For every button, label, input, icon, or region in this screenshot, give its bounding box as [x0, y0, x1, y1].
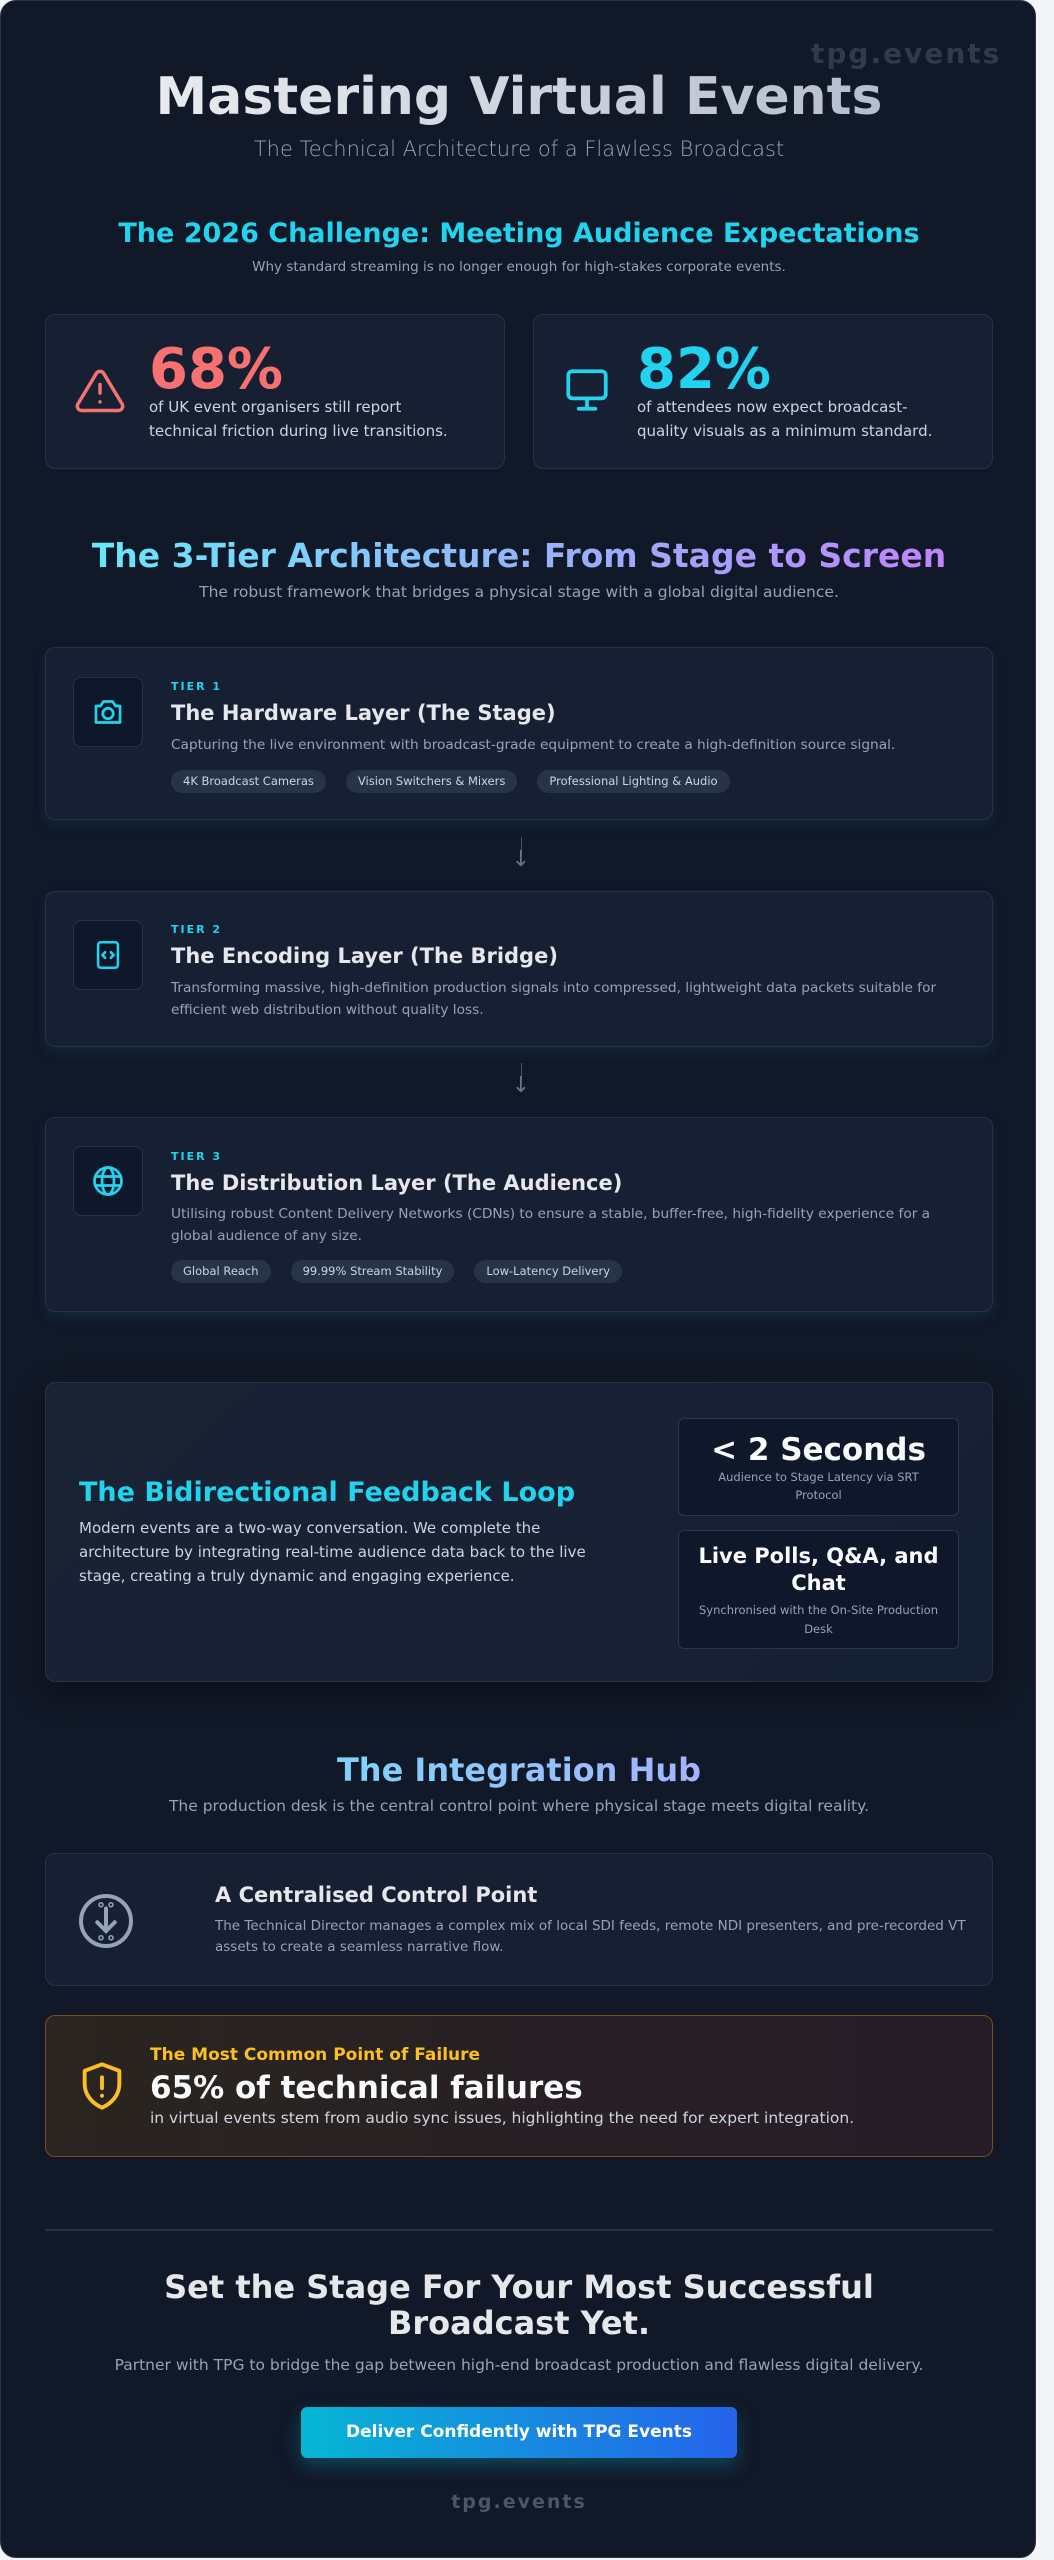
tier desc: Capturing the live environment with broadcast-grade equipment to create a high-definition source signal. [171, 737, 895, 753]
tier heading: The Distribution Layer (The Audience) [171, 1171, 622, 1195]
footer brand: tpg.events [451, 2491, 587, 2513]
stat card: 82% [533, 314, 993, 469]
callout: failure [45, 2015, 993, 2157]
metric box: engagement: Live Polls, Q&A, and Chat [698, 1544, 939, 1595]
tier desc: Utilising robust Content Delivery Networks (CDNs) to ensure a stable, buffer-free, high-fidelity experience for a global audience of any size. [171, 1206, 930, 1244]
card text: The Technical Director manages a complex mix of local SDI feeds, remote NDI presenters, and pre-recorded VT assets to create a seamless narrative flow. [215, 1918, 966, 1955]
icon: monitor [566, 369, 608, 411]
subtext: challenge: Why standard streaming is no longer enough for high-stakes corporate events. [252, 259, 786, 275]
tier label: TIER 1 [171, 680, 222, 693]
tier 3 card [45, 1117, 993, 1312]
metric box: engagement [678, 1530, 959, 1649]
stat desc: of attendees now expect broadcast-quality visuals as a minimum standard. [637, 398, 932, 440]
stat value: 82% [637, 337, 771, 402]
subtitle: The Technical Architecture of a Flawless Broadcast [254, 137, 784, 161]
card: centralised control [45, 1853, 993, 1986]
stat card: 68% [45, 314, 505, 469]
subtext: architecture: The robust framework that bridges a physical stage with a global digital audience. [199, 583, 839, 601]
tier label: TIER 2 [171, 923, 222, 936]
tags: Professional Lighting & Audio [549, 774, 718, 788]
icon: globe [73, 1146, 143, 1216]
tags [171, 770, 730, 793]
tier desc: Transforming massive, high-definition production signals into compressed, lightweight data packets suitable for efficient web distribution without quality loss. [171, 980, 936, 1018]
tier label: TIER 3 [171, 1150, 222, 1163]
metric box: latency: Audience to Stage Latency via SRT Protocol [718, 1470, 919, 1502]
panel: feedback loop [45, 1382, 993, 1682]
icon: control [79, 1894, 133, 1948]
metric box: latency [678, 1418, 959, 1516]
CTA button [301, 2407, 737, 2458]
icon: shield [82, 2062, 122, 2110]
metric box: engagement: Synchronised with the On-Site Production Desk [699, 1603, 938, 1636]
CTA subtext: Partner with TPG to bridge the gap between high-end broadcast production and flawless digital delivery. [115, 2356, 923, 2374]
icon: warning [76, 370, 124, 412]
subtext: integration: The production desk is the central control point where physical stage meets digital reality. [169, 1797, 869, 1815]
stat value: 68% [149, 337, 283, 402]
callout text: in virtual events stem from audio sync issues, highlighting the need for expert integration. [150, 2109, 854, 2127]
tier heading: The Hardware Layer (The Stage) [171, 701, 556, 725]
callout stat: 65% of technical failures [150, 2070, 583, 2106]
heading: architecture: The 3-Tier Architecture: From Stage to Screen [92, 536, 946, 575]
icon: code [73, 920, 143, 990]
tags [171, 1260, 622, 1283]
CTA heading: Set the Stage For Your Most Successful Broadcast Yet. [164, 2268, 874, 2342]
metric box: latency: < 2 Seconds [711, 1432, 926, 1468]
tags: Global Reach [183, 1264, 259, 1278]
card heading: A Centralised Control Point [215, 1883, 537, 1907]
CTA button: Deliver Confidently with TPG Events [346, 2422, 692, 2442]
heading: integration hub: The Integration Hub [337, 1751, 701, 1789]
callout label: The Most Common Point of Failure [150, 2045, 480, 2065]
heading: challenge: The 2026 Challenge: Meeting Audience Expectations [118, 218, 920, 249]
tier heading: The Encoding Layer (The Bridge) [171, 944, 558, 968]
stat desc: of UK event organisers still report technical friction during live transitions. [149, 398, 448, 440]
tags: 99.99% Stream Stability [303, 1264, 442, 1278]
arrow 1: ↓ [512, 847, 530, 872]
icon: camera [73, 677, 143, 747]
feedback heading: The Bidirectional Feedback Loop [79, 1477, 575, 1508]
tags: Low-Latency Delivery [486, 1264, 610, 1278]
brand watermark top: tpg.events [811, 37, 1001, 70]
feedback text: Modern events are a two-way conversation. We complete the architecture by integrating real-time audience data back to the live stage, creating a truly dynamic and engaging experience. [79, 1519, 586, 1585]
arrow 2: ↓ [512, 1073, 530, 1098]
tags: Vision Switchers & Mixers [358, 774, 505, 788]
tier 2 card [45, 891, 993, 1047]
tier 1 card [45, 647, 993, 820]
tags: 4K Broadcast Cameras [183, 774, 314, 788]
